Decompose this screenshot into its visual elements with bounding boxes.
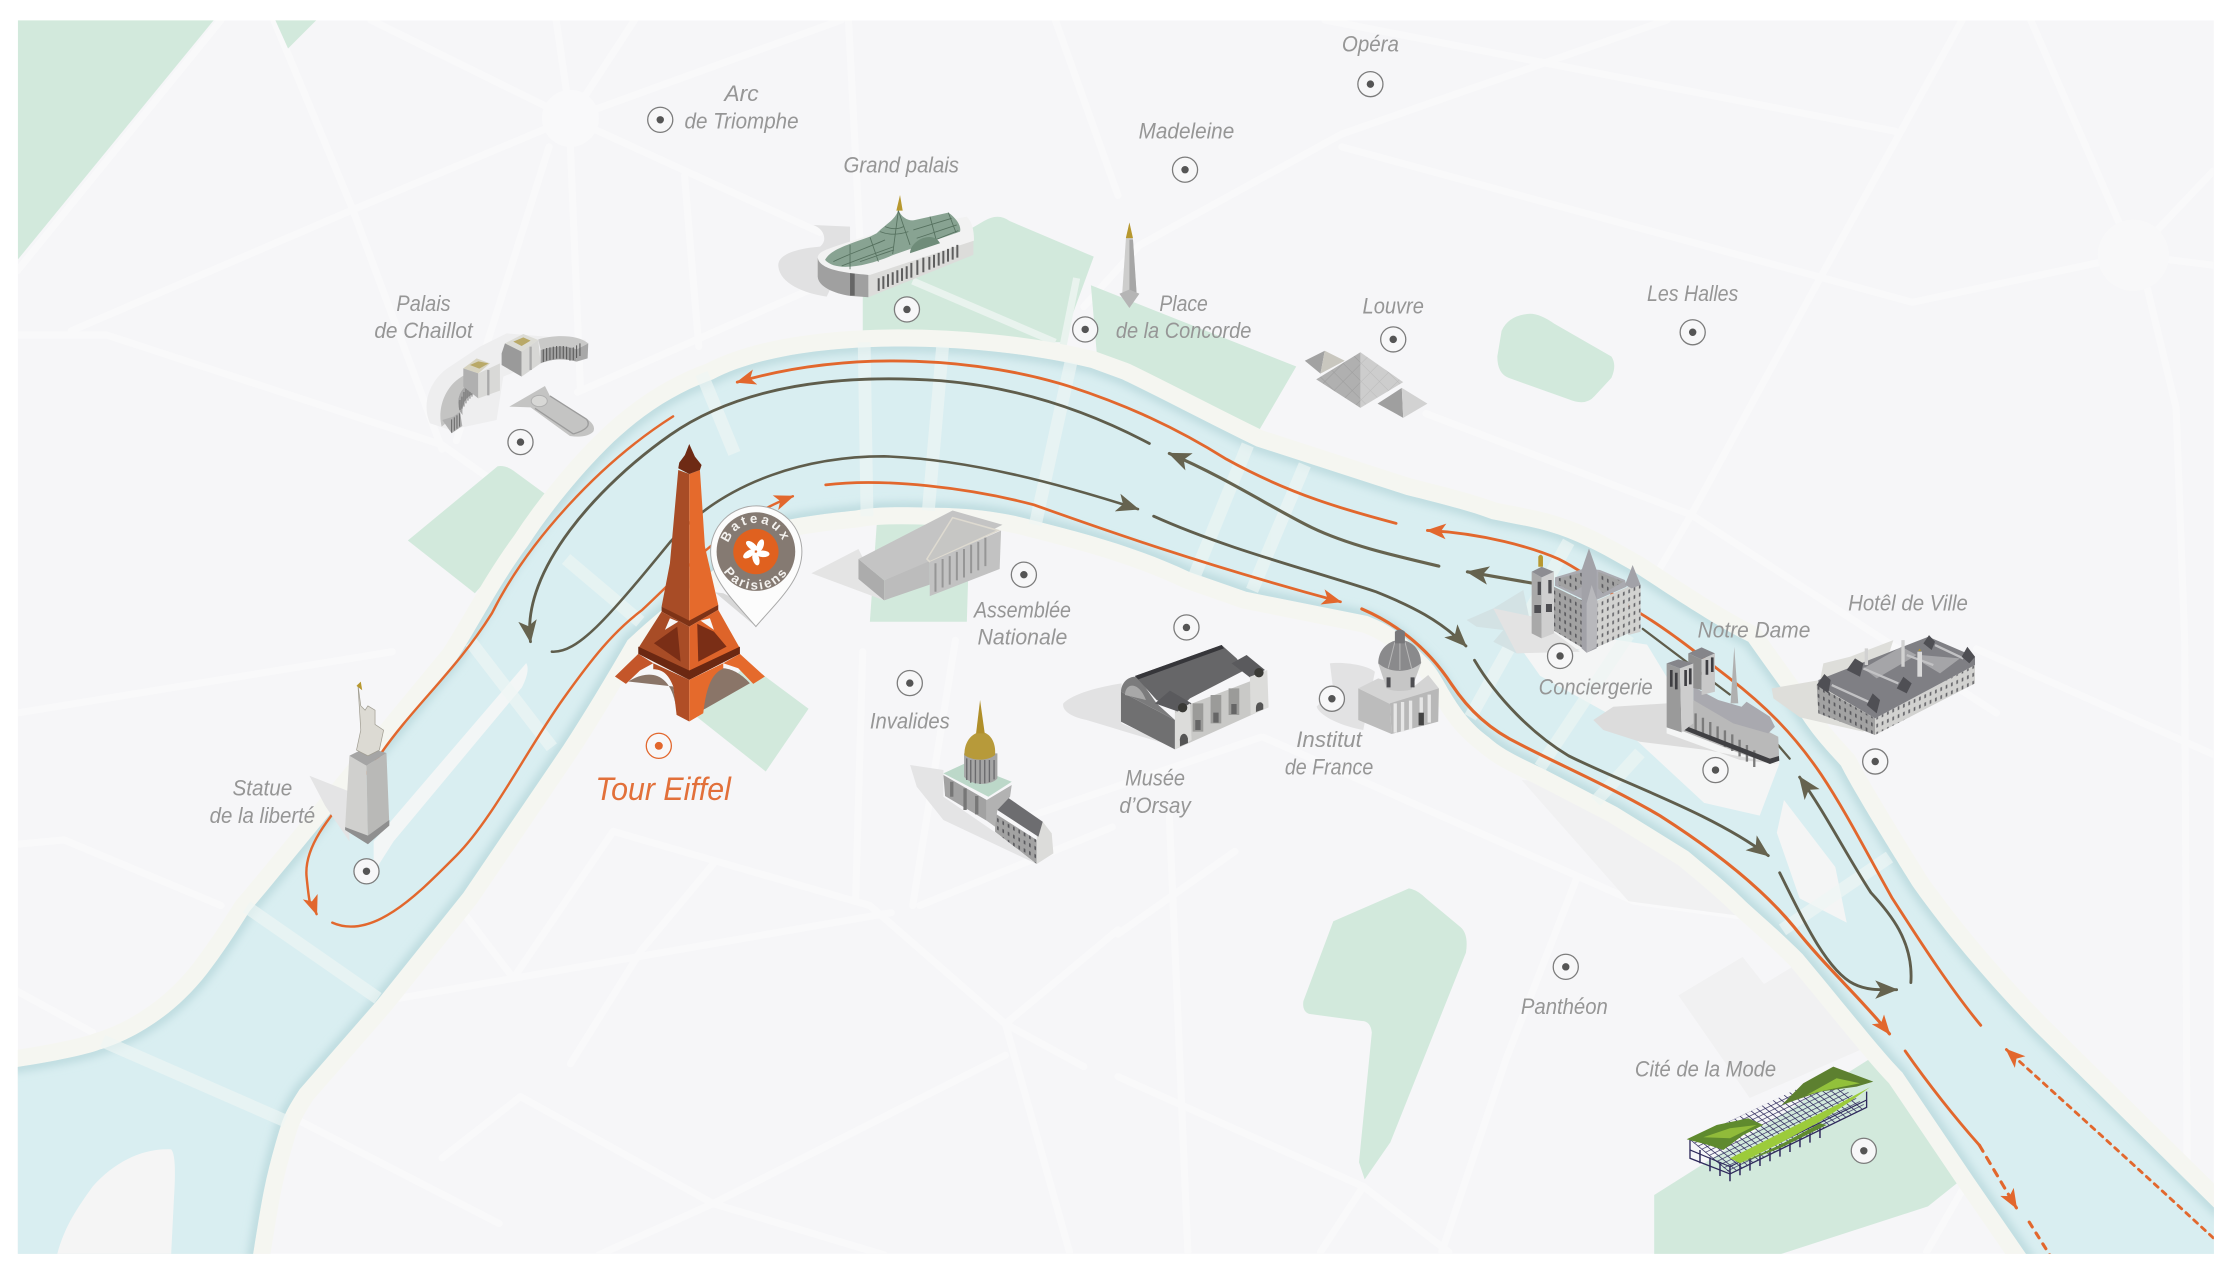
label: Musée d'Orsay: d’Orsay: [1119, 793, 1193, 818]
route: orange to quay: [332, 496, 793, 927]
route: dark return: [1800, 777, 1911, 983]
route: dark Austerlitz: [1780, 873, 1897, 990]
label: Panthéon: Panthéon: [1521, 994, 1608, 1019]
islands: [57, 609, 1847, 1255]
route: dark Cité channel: [1643, 629, 1790, 759]
label: Institut de France: Institut: [1296, 727, 1363, 752]
route: orange west to Statue: [306, 416, 673, 914]
label: Palais de Chaillot: Palais: [396, 291, 451, 316]
label: Assemblée Nationale: Assemblée: [972, 597, 1071, 622]
route: orange Bercy dashed: [1979, 1145, 2016, 1208]
route: dark to Pont Neuf: [1154, 516, 1466, 646]
label: Musée d'Orsay: Musée: [1125, 766, 1185, 791]
icon: Bateaux Parisiens pin: Parisiens: [724, 566, 786, 590]
label: Grand palais: Grand palais: [843, 153, 959, 178]
route: dark short Conciergerie arrow: [1467, 572, 1533, 583]
water edge shading: [0, 347, 2236, 1280]
label: Assemblée Nationale: [972, 597, 1071, 650]
grey urban blocks: [1522, 780, 1871, 1098]
label: Cité de la Mode: Cité de la Mode: [1635, 1057, 1776, 1082]
water: [0, 347, 2236, 1280]
label: Musée d'Orsay: [1119, 766, 1193, 818]
label: Statue de la liberté: de la liberté: [210, 803, 315, 828]
label: Notre Dame: Notre Dame: [1698, 617, 1810, 642]
label: Les Halles: Les Halles: [1647, 281, 1738, 306]
label: Louvre: Louvre: [1363, 294, 1424, 319]
map pins: [354, 72, 1888, 1163]
label: Hôtel de Ville: Hotêl de Ville: [1848, 590, 1968, 615]
building: Conciergerie: [1467, 548, 1641, 653]
label: Opéra: Opéra: [1342, 31, 1399, 56]
building: Hôtel de Ville: [1772, 635, 1975, 735]
label: Arc de Triomphe: Arc: [722, 81, 759, 106]
label: Place de la Concorde: de la Concorde: [1116, 318, 1251, 343]
park paths: [913, 278, 1077, 349]
route: orange south arm: [826, 483, 1340, 602]
route: orange dashed continuation: [2029, 1222, 2051, 1256]
label: Arc de Triomphe: [684, 81, 799, 133]
label: Madeleine: Madeleine: [1139, 118, 1234, 143]
building: Institut de France: [1317, 630, 1439, 734]
label: Place de la Concorde: [1116, 291, 1251, 343]
building: Statue de la liberté: [309, 682, 389, 844]
river banks: [90, 329, 2190, 1194]
boat routes: [306, 361, 2213, 1256]
label: Invalides: Invalides: [870, 709, 950, 734]
labels: [210, 31, 1968, 1082]
route: orange east to Concorde: [1427, 530, 1981, 1025]
building: Musée d'Orsay: [1063, 645, 1269, 749]
pin: Tour Eiffel: [646, 733, 671, 758]
route: orange south channel east: [1362, 609, 1889, 1034]
building: Notre Dame: [1593, 647, 1780, 767]
label: Statue de la liberté: Statue: [232, 776, 292, 801]
label: Tour Eiffel: Tour Eiffel: [595, 770, 732, 807]
building: Obelisk: [1119, 222, 1139, 308]
building: Cité de la Mode: [1687, 1067, 1873, 1181]
label: Conciergerie: Conciergerie: [1539, 674, 1653, 699]
label: Institut de France: de France: [1285, 754, 1373, 779]
building: Palais de Chaillot: [427, 333, 594, 437]
label: Institut de France: [1285, 727, 1373, 779]
label: Palais de Chaillot: de Chaillot: [374, 318, 474, 343]
building: Louvre pyramids: [1305, 351, 1427, 418]
label: Palais de Chaillot: [374, 291, 474, 343]
building: Invalides: [910, 700, 1053, 864]
route: orange Bercy solid: [1905, 1051, 1979, 1145]
icon: Bateaux Parisiens pin: Bateaux: [720, 516, 788, 542]
label: Place de la Concorde: Place: [1159, 291, 1208, 316]
building: Grand Palais: [778, 195, 974, 297]
building: Tour Eiffel: [615, 444, 765, 722]
route: dark south channel: [1475, 660, 1768, 856]
label: Assemblée Nationale: Nationale: [978, 625, 1067, 650]
route: dark upper loop: [530, 379, 1149, 642]
route: dark lower loop: [552, 456, 1138, 652]
route: orange dashed return: [2006, 1050, 2213, 1238]
label: Arc de Triomphe: de Triomphe: [684, 108, 799, 133]
label: Statue de la liberté: [210, 776, 315, 828]
bridges: [103, 342, 1889, 1121]
river Seine: [0, 347, 2236, 1280]
icon: Bateaux Parisiens pin: [710, 505, 802, 628]
building: Assemblée Nationale: [811, 511, 1002, 600]
pinwheel: [743, 539, 770, 566]
route: orange north channel west: [737, 361, 1396, 523]
route: dark north arm: [1169, 453, 1439, 566]
